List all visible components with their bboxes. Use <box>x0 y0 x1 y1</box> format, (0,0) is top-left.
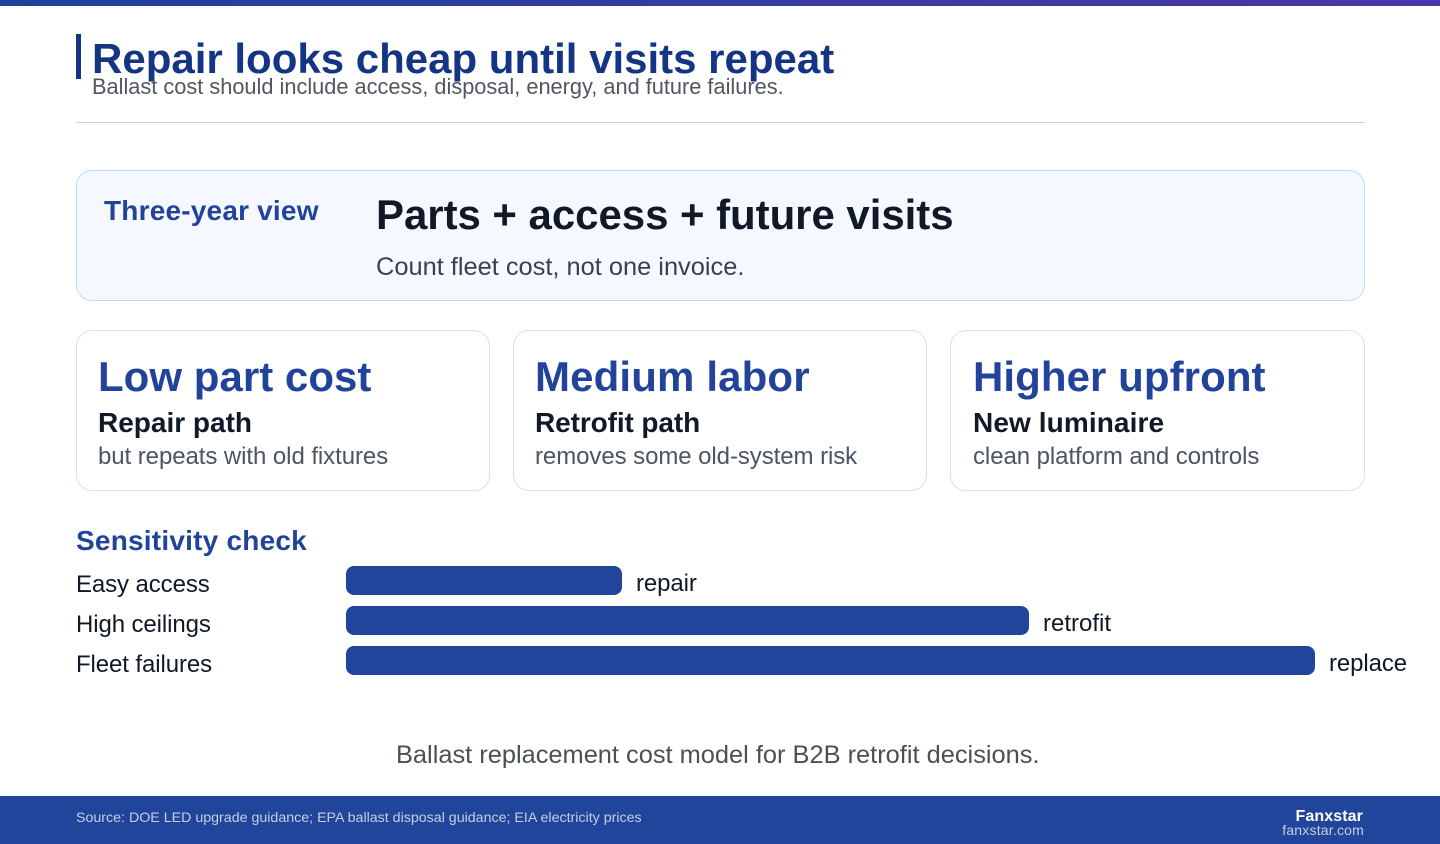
panel label: Three-year view <box>104 195 319 226</box>
panel headline: Parts + access + future visits <box>376 191 954 238</box>
bar: retrofit <box>346 606 1029 635</box>
row label: fleet failures: Fleet failures <box>76 651 212 678</box>
card: new luminaire <box>950 330 1365 491</box>
row label: easy access: Easy access <box>76 571 210 598</box>
bar label: repair: repair <box>636 570 697 597</box>
subtitle: Ballast cost should include access, disposal, energy, and future failures. <box>92 74 784 99</box>
section heading: sensitivity check: Sensitivity check <box>76 525 307 556</box>
source text: Source: DOE LED upgrade guidance; EPA ballast disposal guidance; EIA electricity prices <box>76 810 642 826</box>
card title: Retrofit path <box>535 407 700 438</box>
card description: but repeats with old fixtures <box>98 443 388 470</box>
panel: three-year view <box>76 170 1365 301</box>
card: repair path <box>76 330 490 491</box>
card headline: Medium labor <box>535 353 810 400</box>
caption: Ballast replacement cost model for B2B retrofit decisions. <box>396 741 1040 769</box>
brand name: Fanxstar <box>1296 808 1363 825</box>
bar: replace <box>346 646 1315 675</box>
card headline: Higher upfront <box>973 353 1266 400</box>
footer band <box>0 796 1440 844</box>
bar label: replace: replace <box>1329 650 1407 677</box>
top gradient bar <box>0 0 1440 6</box>
card: retrofit path <box>513 330 927 491</box>
bar: repair <box>346 566 622 595</box>
card description: clean platform and controls <box>973 443 1259 470</box>
card title: New luminaire <box>973 407 1164 438</box>
title accent bar <box>76 34 81 79</box>
bar label: retrofit: retrofit <box>1043 610 1111 637</box>
card description: removes some old-system risk <box>535 443 857 470</box>
header divider <box>76 122 1365 123</box>
card headline: Low part cost <box>98 353 371 400</box>
row label: high ceilings: High ceilings <box>76 611 211 638</box>
brand url: fanxstar.com <box>1282 822 1364 838</box>
card title: Repair path <box>98 407 252 438</box>
panel note: Count fleet cost, not one invoice. <box>376 253 744 281</box>
title: Repair looks cheap until visits repeat <box>92 35 834 82</box>
